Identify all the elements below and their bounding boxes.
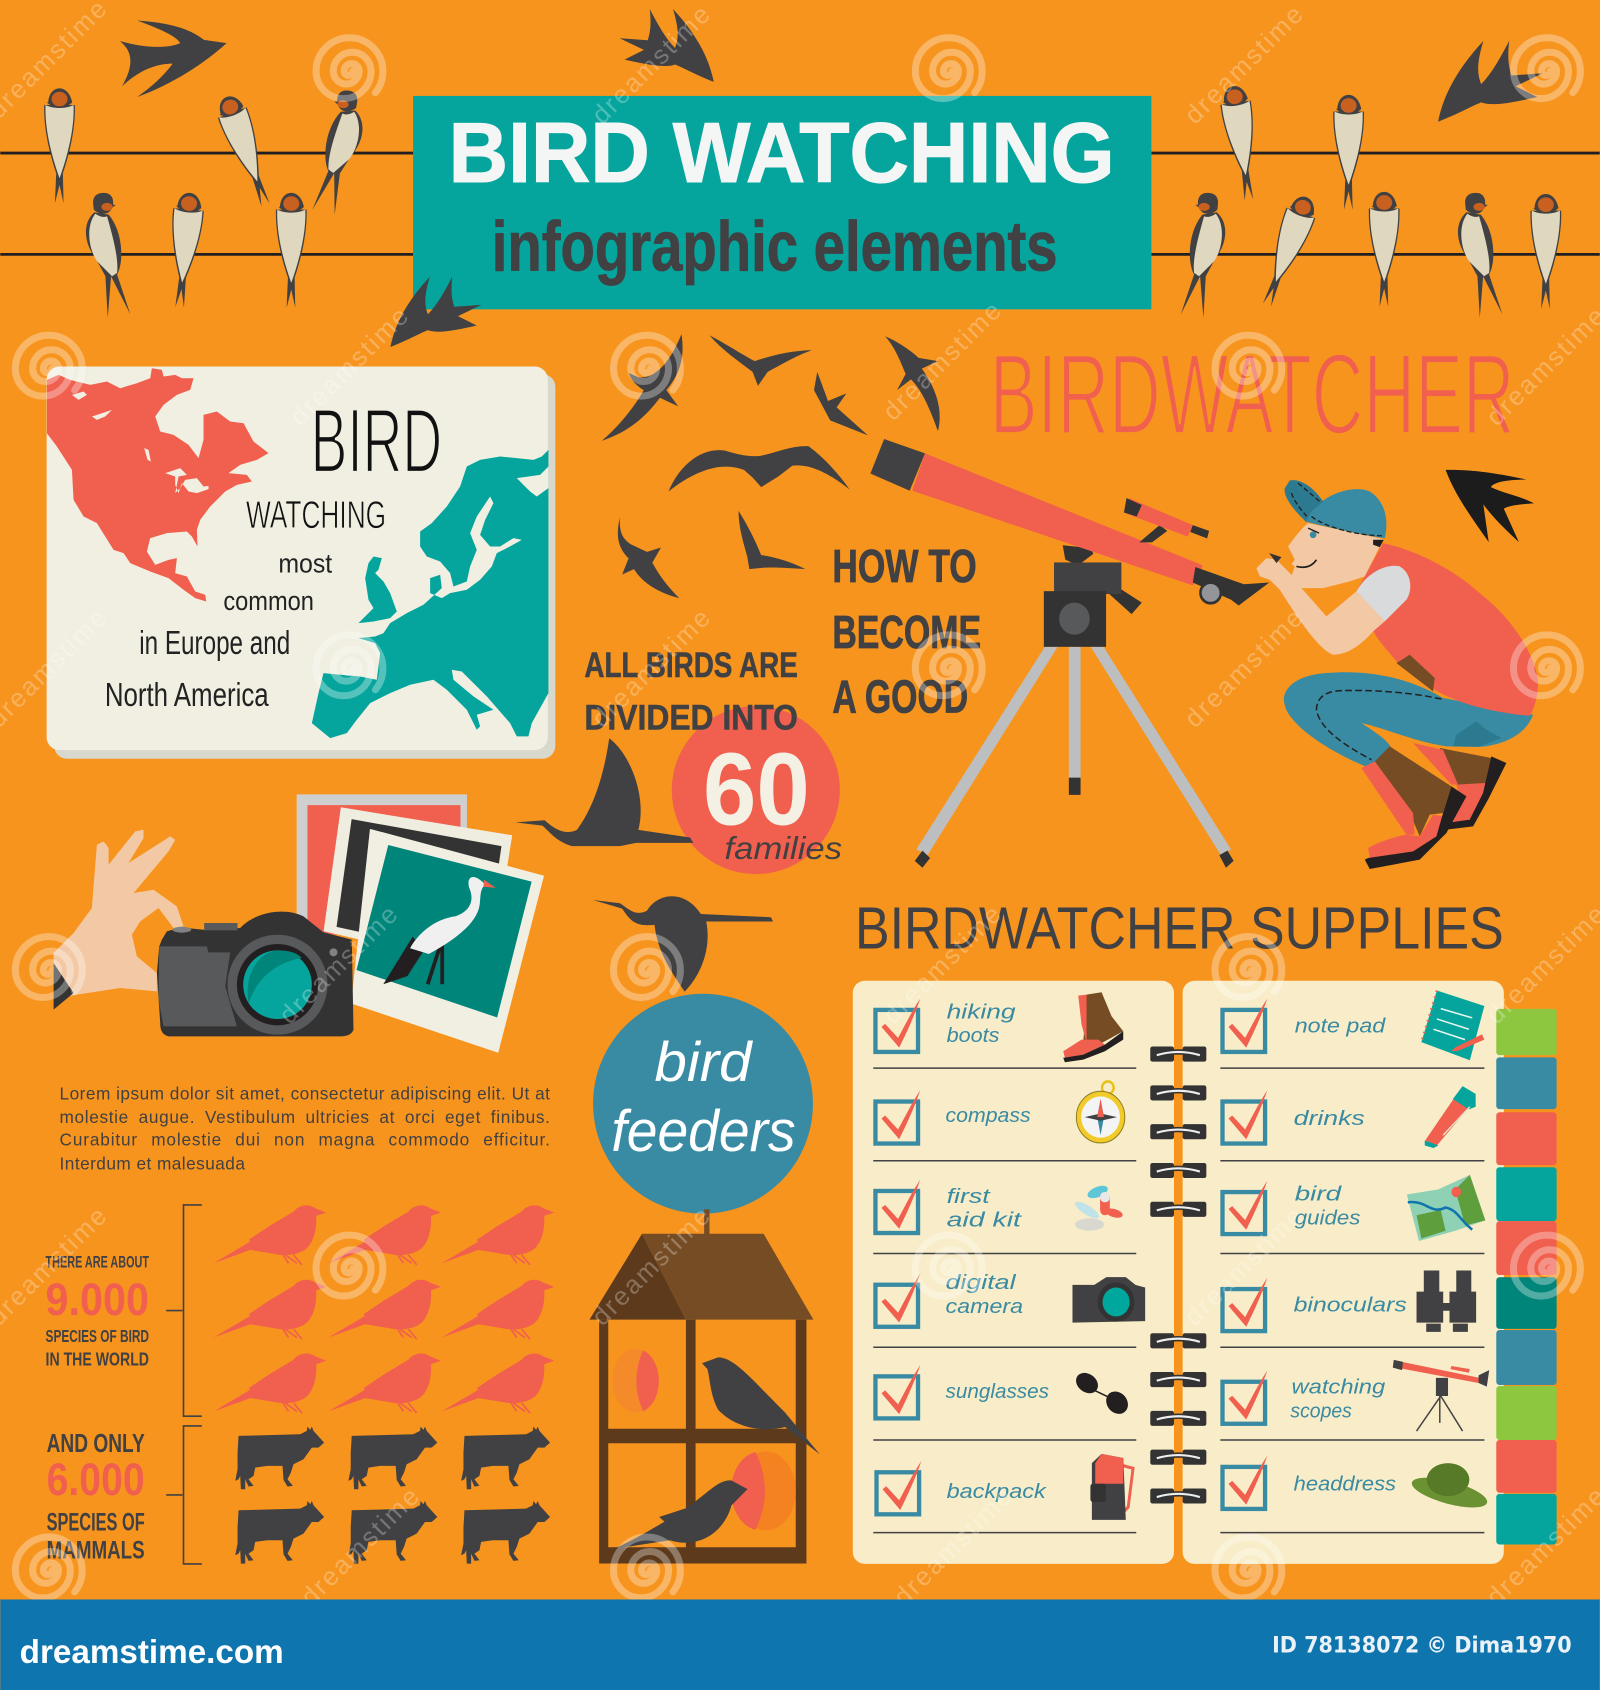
item labels: binoculars (1294, 1294, 1407, 1317)
panel: map card: North America (105, 677, 269, 714)
bracket: mammals (166, 1426, 202, 1564)
panel: map card: in Europe and (139, 625, 290, 662)
icon: map (1407, 1175, 1485, 1241)
swallows perched on right wires (1181, 84, 1561, 318)
gull flock (602, 334, 940, 598)
stat: 6,000 species of mammals: 6.000 (47, 1454, 145, 1505)
callout: 60 families: 60 (703, 731, 810, 847)
item labels: compass (946, 1104, 1031, 1127)
notebook spiral rings (1150, 1047, 1206, 1504)
map: Europe (312, 450, 548, 738)
stat: 9,000 species of bird (46, 1254, 149, 1370)
panel: map card: most (278, 548, 333, 578)
footer logo: dreamstime.com (20, 1634, 284, 1671)
watermark text: dreamstime (285, 301, 416, 431)
item labels: note pad (1295, 1015, 1386, 1038)
watermark text: dreamstime (1180, 0, 1310, 130)
main title: BIRD WATCHING (449, 106, 1115, 201)
illustration: bird feeder house (590, 1209, 820, 1563)
flying cranes (515, 738, 773, 992)
icon: flask (1425, 1086, 1476, 1148)
stat: 9,000 species of bird: 9.000 (46, 1274, 149, 1325)
item labels: headdress (1294, 1473, 1396, 1496)
item labels: digital (946, 1271, 1016, 1294)
stat: 9,000 species of bird: SPECIES OF BIRD (46, 1326, 149, 1346)
orange slices (613, 1349, 658, 1413)
vest (1356, 543, 1538, 716)
swallow near person (1446, 470, 1534, 542)
stat: 6,000 species of mammals (47, 1430, 145, 1565)
icon: hiking boot (1063, 992, 1123, 1062)
lorem text: molestie augue. Vestibulum ultricies at orci eget finibus. (60, 1107, 550, 1127)
icon: sunglasses (1073, 1369, 1132, 1419)
card text: BIRD (311, 391, 442, 492)
notebook index tabs (1496, 1009, 1557, 1544)
flying swallows (120, 9, 1543, 122)
lorem text: Curabitur molestie dui non magna commodo efficitur. (60, 1130, 550, 1150)
illustration: birdwatcher person (1256, 480, 1538, 869)
watermark text: dreamstime (889, 1481, 1019, 1612)
swallows perched on left wires (44, 88, 365, 318)
footer credit: ID 78138072 © Dima1970 (1272, 1632, 1572, 1658)
stat: 6,000 species of mammals: MAMMALS (47, 1538, 145, 1565)
pictogram: birds (214, 1205, 554, 1413)
hand holding camera (54, 830, 353, 1036)
callout: 60 families: families (725, 831, 842, 866)
watermark text: dreamstime (274, 899, 405, 1030)
illustration: telescope on tripod (870, 439, 1269, 868)
text: all birds are divided into (584, 645, 798, 738)
footer bar (0, 1599, 1600, 1690)
subtitle: infographic elements (492, 208, 1058, 286)
head (1288, 523, 1383, 588)
icon: binoculars (1417, 1270, 1476, 1332)
feeder birds (702, 1357, 820, 1454)
stat: 6,000 species of mammals: AND ONLY (47, 1430, 145, 1458)
item labels: watching (1291, 1376, 1386, 1399)
watermark text: dreamstime (878, 899, 1008, 1030)
swallow over banner corner (390, 277, 481, 347)
checkboxes (1222, 998, 1267, 1509)
text: all birds are divided into: ALL BIRDS ARE (584, 645, 798, 685)
callout: bird feeders (593, 994, 813, 1214)
item labels: first (947, 1185, 991, 1208)
bracket: birds (166, 1205, 202, 1416)
callout: bird feeders: feeders (611, 1099, 796, 1164)
item labels: camera (946, 1295, 1023, 1318)
checkboxes (875, 998, 921, 1514)
text: all birds are divided into: DIVIDED INTO (584, 698, 798, 738)
title banner (413, 96, 1151, 309)
front boot (1375, 746, 1451, 836)
stat: 6,000 species of mammals: SPECIES OF (47, 1509, 145, 1536)
map: North America (47, 368, 269, 601)
stat: 9,000 species of bird: THERE ARE ABOUT (46, 1253, 149, 1271)
panel: map card: common (223, 586, 314, 616)
callout: bird feeders: bird (654, 1030, 753, 1093)
stat: 9,000 species of bird: IN THE WORLD (46, 1349, 149, 1370)
icon: note pad (1421, 991, 1484, 1060)
callout: 60 families (672, 706, 842, 874)
rear boot (1440, 748, 1491, 788)
item labels: boots (947, 1024, 999, 1047)
item labels (1290, 1015, 1407, 1496)
panel: map card (47, 366, 555, 759)
item labels: guides (1295, 1206, 1360, 1229)
heading: birdwatcher supplies: BIRDWATCHER SUPPLIES (855, 894, 1504, 961)
pictogram: cows (235, 1427, 550, 1564)
item labels: drinks (1294, 1107, 1365, 1130)
watermark text: dreamstime (587, 1201, 717, 1331)
item labels: hiking (947, 1001, 1016, 1024)
item labels (946, 1001, 1049, 1503)
icon: compass (1076, 1081, 1125, 1143)
trousers (1284, 672, 1533, 768)
text: how to become a good: A GOOD (832, 670, 968, 722)
item labels: sunglasses (946, 1380, 1049, 1403)
lorem text: Interdum et malesuada (60, 1153, 245, 1173)
panel: notebook right page (1183, 981, 1504, 1564)
arm and sleeve (1256, 558, 1385, 655)
watermark text: dreamstime (1180, 1201, 1310, 1331)
icon: hat (1409, 1463, 1490, 1514)
text: how to become a good (832, 540, 981, 722)
watermark text: dreamstime (878, 296, 1008, 426)
panel: notebook left page (853, 981, 1174, 1564)
text: how to become a good: BECOME (832, 606, 981, 658)
watermark text: dreamstime (587, 603, 717, 733)
icon: backpack (1090, 1454, 1133, 1520)
lorem text (60, 1083, 550, 1173)
cap (1305, 489, 1386, 538)
item labels: bird (1295, 1183, 1342, 1206)
icon: digital camera (1072, 1277, 1145, 1323)
item labels: backpack (947, 1480, 1048, 1503)
item labels: scopes (1290, 1399, 1352, 1422)
telephone wires (0, 153, 1600, 254)
icon: mini telescope (1393, 1360, 1489, 1431)
watermark text: dreamstime (1180, 603, 1310, 733)
watermark text: dreamstime (587, 0, 717, 130)
panel: map card: WATCHING (246, 494, 386, 537)
crane in photo (383, 877, 496, 984)
icon: pills (1073, 1183, 1124, 1231)
camera (157, 912, 353, 1036)
lorem text: Lorem ipsum dolor sit amet, consectetur adipiscing elit. Ut at (60, 1083, 550, 1103)
watermark text: dreamstime (296, 1481, 426, 1612)
photos stack (297, 794, 544, 1053)
item labels: aid kit (947, 1209, 1023, 1232)
text: how to become a good: HOW TO (832, 540, 977, 592)
